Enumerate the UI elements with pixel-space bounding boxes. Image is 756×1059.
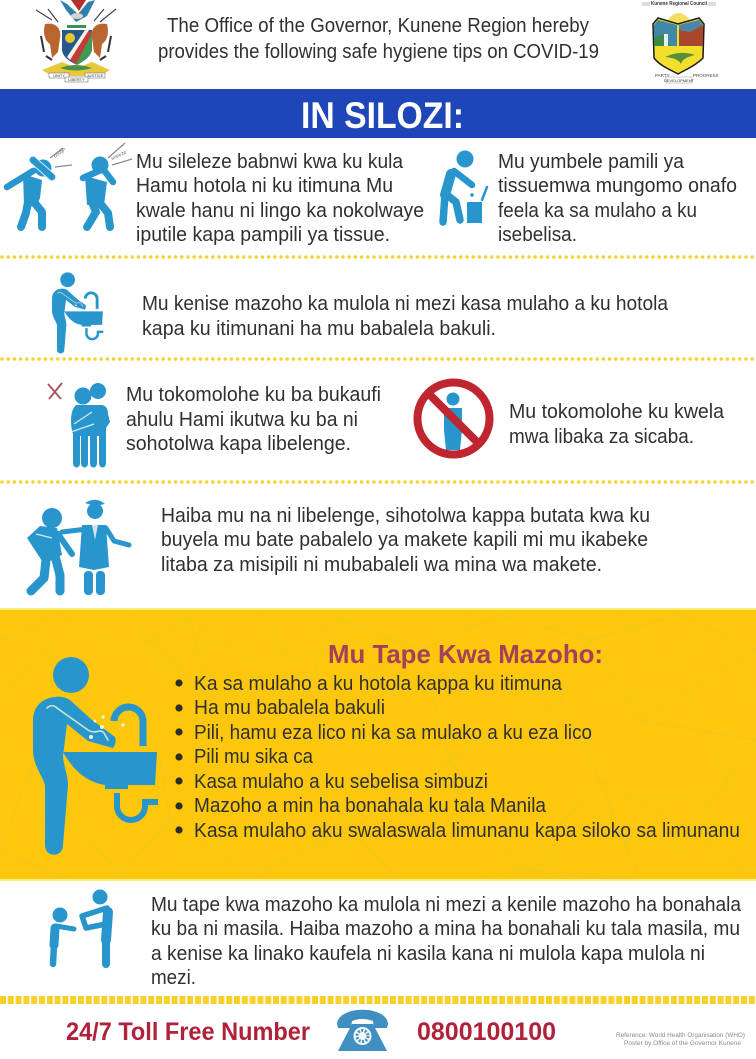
icon: person using bin	[443, 150, 487, 223]
text: avoid close contact: ahulu Hami ikutwa ku ba ni	[126, 409, 358, 431]
icon: adult helping child wash hands	[52, 890, 108, 964]
icon: sick person and doctor	[27, 500, 129, 595]
icon: person washing hands	[52, 272, 103, 353]
banner: in silozi: IN SILOZI:	[301, 95, 464, 136]
icon: Namibia coat of arms	[36, 0, 116, 82]
text: avoid public places: mwa libaka za sicaba.	[509, 426, 694, 448]
text: supervise children: mezi.	[151, 967, 196, 989]
heading: office of the governor: provides the following safe hygiene tips on COVID-19	[158, 41, 599, 63]
list: when to wash hands: Mazoho a min ha bonahala ku tala Manila	[194, 795, 547, 817]
text: cover mouth: Hamu hotola ni ku itimuna Mu	[136, 175, 393, 197]
text: dispose of tissue: Mu yumbele pamili ya	[498, 151, 685, 173]
icon: Kunene Regional Council crest: PROGRESS	[693, 73, 719, 78]
panel: hand washing	[0, 608, 756, 881]
icon: no hugging	[48, 383, 110, 468]
icon: Kunene Regional Council crest	[642, 1, 719, 83]
text: avoid close contact: Mu tokomolohe ku ba bukaufi	[126, 384, 381, 406]
text: seek medical attention: Haiba mu na ni libelenge, sihotolwa kappa butata kwa ku	[161, 505, 650, 527]
text: seek medical attention: buyela mu bate pabalelo ya makete kapili mi mu ikabeke	[161, 529, 648, 551]
icon: person sneezing into tissue: sneeze	[110, 149, 128, 162]
icon: Namibia coat of arms: LIBERTY	[68, 77, 85, 82]
text: supervise children: ku ba ni masila. Haiba mazoho a mina ha bonahali ku tala masila, mu	[151, 918, 740, 940]
text: dispose of tissue	[498, 151, 737, 246]
text: cover mouth: kwale hanu ni lingo ka nokolwaye	[136, 200, 424, 222]
list: when to wash hands: Kasa mulaho a ku sebelisa simbuzi	[194, 771, 488, 793]
text: wash hands with soap	[142, 293, 669, 340]
list: when to wash hands: Pili, hamu eza lico ni ka sa mulako a ku eza lico	[194, 722, 592, 744]
icon: telephone	[337, 1010, 388, 1051]
text: wash hands with soap: Mu kenise mazoho ka mulola ni mezi kasa mulaho a ku hotola	[142, 293, 669, 315]
text: supervise children: Mu tape kwa mazoho ka mulola ni mezi a kenile mazoho ha bonahala	[151, 894, 742, 916]
footer: reference credit: Reference: World Health Organisation (WHO)	[616, 1032, 745, 1039]
footer: phone number: 0800100100	[417, 1018, 556, 1046]
footer: reference credit	[616, 1032, 745, 1047]
icon: Kunene Regional Council crest: Kunene Regional Council	[651, 1, 707, 7]
heading: office of the governor: The Office of the Governor, Kunene Region hereby	[167, 15, 589, 37]
text: dispose of tissue: isebelisa.	[498, 224, 577, 246]
text: cover mouth: iputile kapa pampili ya tissue.	[136, 224, 390, 246]
text: supervise children: a kenise ka linako kaufela ni kasila kana ni mulola kapa mulola ni	[151, 943, 705, 965]
text: dispose of tissue: tissuemwa mungomo onafo	[498, 175, 737, 197]
text: cover mouth: Mu sileleze babnwi kwa ku kula	[136, 151, 404, 173]
icon: person sneezing into tissue	[83, 143, 132, 227]
text: seek medical attention: litaba za misipili ni mubabaleli wa mina wa makete.	[161, 554, 602, 576]
icon: no public places sign	[418, 382, 490, 454]
list: when to wash hands: Ha mu babalela bakuli	[194, 697, 385, 719]
text: avoid public places	[509, 401, 725, 448]
heading: how to wash hands: Mu Tape Kwa Mazoho:	[328, 639, 603, 669]
text: dispose of tissue: feela ka sa mulaho a ku	[498, 200, 697, 222]
icon: person coughing into elbow: cough	[53, 146, 67, 160]
heading: office of the governor	[158, 15, 599, 63]
text: avoid public places: Mu tokomolohe ku kwela	[509, 401, 725, 423]
text: supervise children	[151, 894, 742, 989]
icon: Kunene Regional Council crest: DEVELOPMENT	[664, 78, 695, 83]
text: avoid close contact: sohotolwa kapa libelenge.	[126, 433, 351, 455]
text: avoid close contact	[126, 384, 381, 455]
icon: large hand washing figure	[33, 657, 158, 855]
list: when to wash hands: Pili mu sika ca	[194, 746, 314, 768]
banner: in silozi	[0, 89, 756, 138]
footer: toll free label: 24/7 Toll Free Number	[66, 1018, 310, 1046]
text: wash hands with soap: kapa ku itimunani ha mu babalela bakuli.	[142, 318, 496, 340]
icon: person coughing into elbow	[7, 146, 72, 227]
footer: reference credit: Poster by Office of the Governor Kunene	[624, 1040, 741, 1047]
list: when to wash hands	[175, 673, 740, 842]
icon: Kunene Regional Council crest: PARTY	[655, 73, 670, 78]
icon: Namibia coat of arms: UNITY	[53, 73, 65, 78]
list: when to wash hands: Kasa mulaho aku swalaswala limunanu kapa siloko sa limunanu	[194, 820, 740, 842]
text: cover mouth	[136, 151, 424, 246]
list: when to wash hands: Ka sa mulaho a ku hotola kappa ku itimuna	[194, 673, 563, 695]
icon: Namibia coat of arms: JUSTICE	[87, 73, 104, 78]
text: seek medical attention	[161, 505, 650, 576]
